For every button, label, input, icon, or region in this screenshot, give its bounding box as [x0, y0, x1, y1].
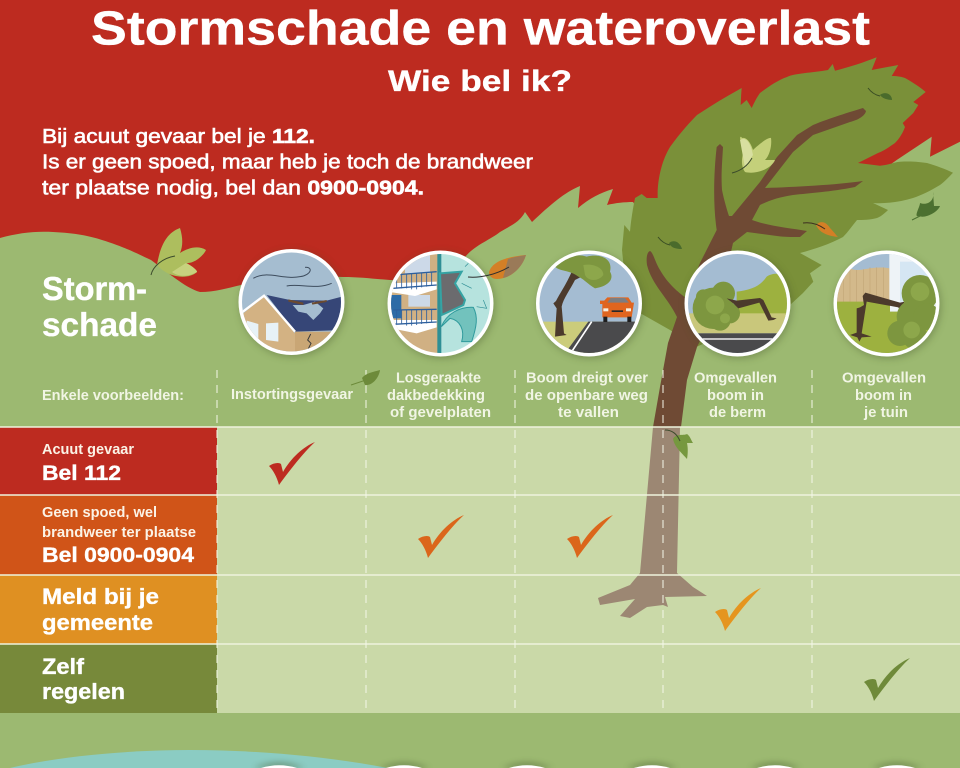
row: meld bij gemeente: [0, 575, 217, 644]
tree branches and upper trunk: [647, 108, 866, 427]
column labels: je tuin: [863, 405, 908, 421]
row: meld bij gemeente: gemeente: [42, 610, 153, 635]
column labels: te vallen: [558, 405, 619, 421]
row: geen spoed: [0, 495, 217, 575]
check: brandweer, boom dreigt: [567, 515, 613, 558]
check: brandweer, dakbedekking: [418, 515, 464, 558]
icon: omgevallen boom in de berm: [683, 250, 793, 360]
leaf: orange in canopy: [803, 222, 838, 237]
row: geen spoed: brandweer ter plaatse: [42, 525, 196, 541]
icons: next section circle tops: [253, 762, 923, 768]
leaf: brown near facade icon: [468, 255, 526, 279]
leaf: pale green near heading: [151, 228, 206, 277]
title: Stormschade en wateroverlast: [91, 2, 870, 56]
icon: dakbedekking en gevelplaten: [383, 247, 497, 360]
row: acuut gevaar: Acuut gevaar: [42, 442, 134, 458]
column labels: Omgevallen: [842, 370, 926, 386]
leaf: dark green right of canopy: [912, 192, 940, 220]
check: acuut gevaar, instortingsgevaar: [269, 442, 315, 485]
row: geen spoed: Bel 0900-0904: [42, 544, 194, 567]
icon: boom dreigt over weg te vallen: [533, 250, 647, 360]
intro text: [42, 125, 533, 200]
row: acuut gevaar: Bel 112: [42, 462, 121, 485]
heading: stormschade: schade: [42, 306, 157, 343]
heading: stormschade: [42, 270, 157, 343]
icon: omgevallen boom in de tuin: [833, 250, 943, 360]
column labels: of gevelplaten: [390, 405, 491, 421]
row: geen spoed: Geen spoed, wel: [42, 505, 157, 521]
intro text: ter plaatse nodig, bel dan 0900-0904.: [42, 176, 424, 200]
check: gemeente, boom in berm: [715, 588, 761, 631]
column labels: [231, 370, 926, 421]
subtitle: Wie bel ik?: [388, 65, 572, 98]
column labels: de berm: [709, 405, 766, 421]
row: zelf regelen: regelen: [42, 679, 125, 704]
row: meld bij gemeente: Meld bij je: [42, 584, 159, 609]
row: zelf regelen: [0, 644, 217, 713]
intro text: Is er geen spoed, maar heb je toch de brandweer: [42, 150, 533, 174]
column labels: Omgevallen: [694, 370, 777, 386]
icon: instortingsgevaar: [237, 247, 347, 358]
column labels: dakbedekking: [387, 388, 485, 404]
table background: [217, 427, 960, 713]
column labels: Losgeraakte: [396, 370, 481, 386]
row: zelf regelen: Zelf: [42, 654, 85, 679]
tree trunk over table: [598, 427, 707, 618]
heading: stormschade: Storm-: [42, 270, 147, 307]
column labels: Instortingsgevaar: [231, 387, 353, 403]
column labels: de openbare weg: [525, 388, 648, 404]
check: zelf regelen, boom in tuin: [864, 658, 910, 701]
intro text: Bij acuut gevaar bel je 112.: [42, 125, 315, 148]
leaf: small dark in top of canopy: [868, 88, 892, 100]
leaf: small green near label: [351, 370, 380, 385]
column labels: boom in: [855, 388, 912, 404]
leaf: small dark in lower canopy: [658, 237, 682, 249]
column labels: boom in: [707, 388, 764, 404]
tree canopy: [622, 57, 953, 347]
row: acuut gevaar: [0, 427, 217, 495]
leaf: green on trunk: [665, 430, 693, 459]
label: enkele voorbeelden: Enkele voorbeelden:: [42, 388, 184, 404]
teal hill of the next section: [10, 750, 388, 768]
leaf: pale green in canopy: [732, 137, 775, 173]
column labels: Boom dreigt over: [526, 370, 648, 386]
